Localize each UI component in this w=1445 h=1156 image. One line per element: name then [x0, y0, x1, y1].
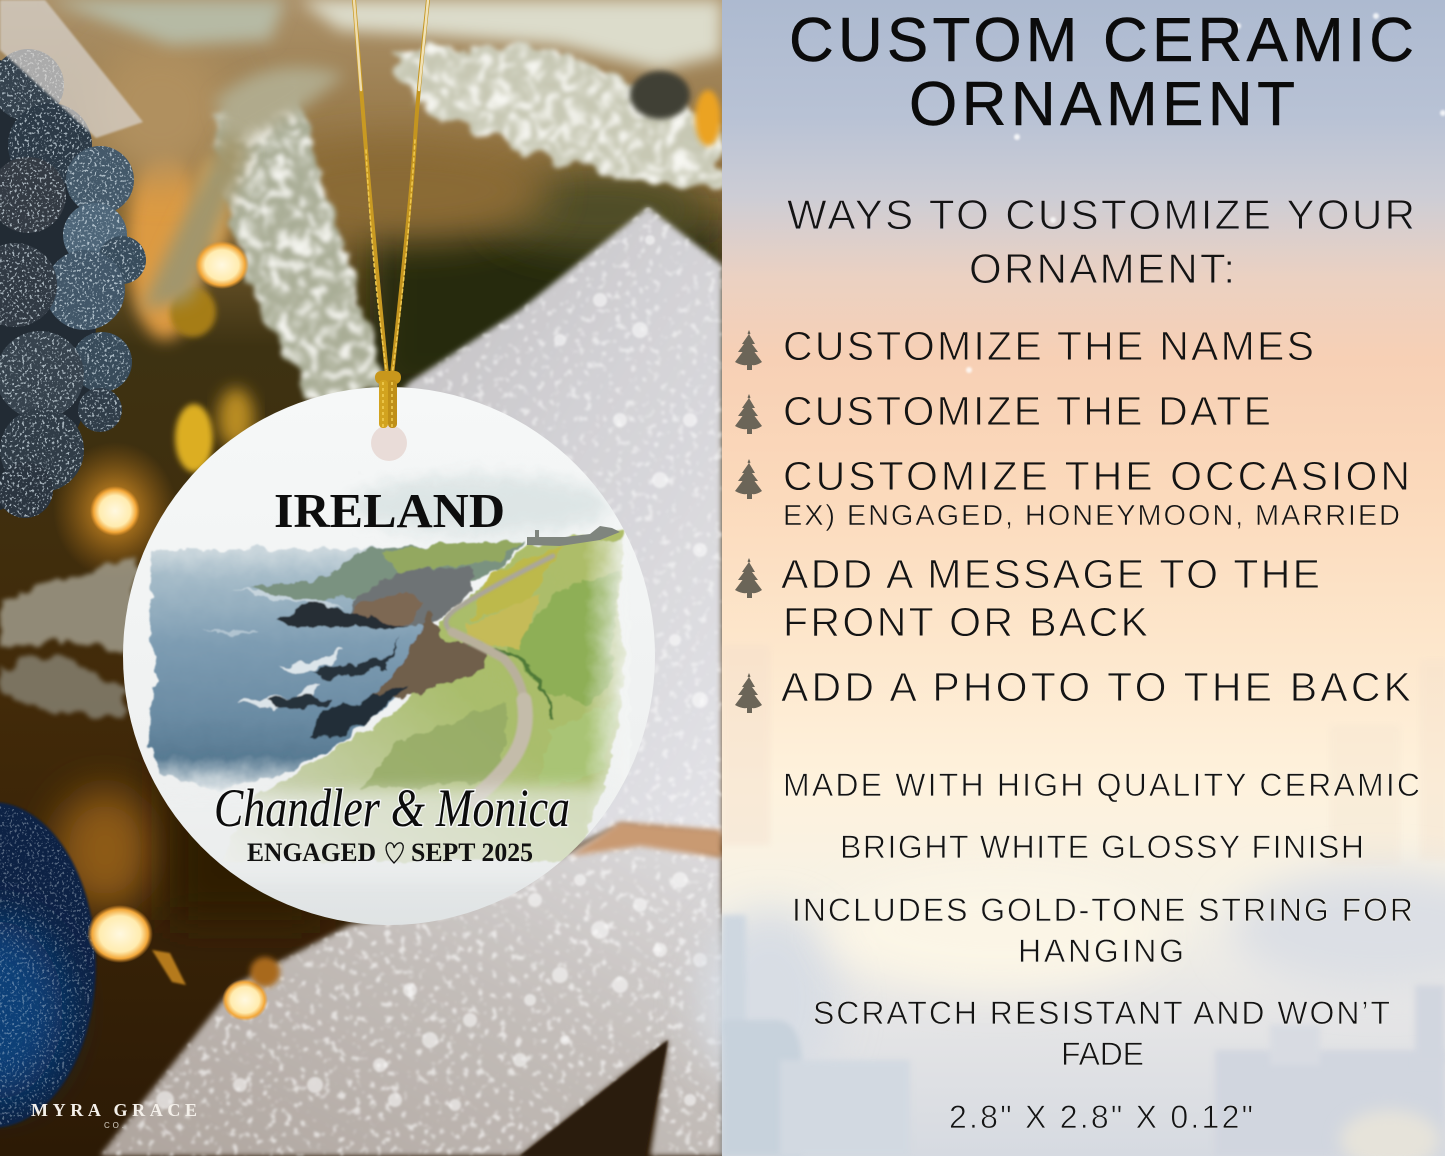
main grass land — [220, 530, 625, 860]
option: occasion examples: EX) ENGAGED, HONEYMOON, MARRIED — [783, 500, 1400, 532]
sky wash — [350, 475, 610, 535]
feature: glossy finish: BRIGHT WHITE GLOSSY FINISH — [840, 829, 1364, 865]
lighthouse buildings — [527, 526, 620, 546]
heading: ways to customize: ORNAMENT: — [969, 245, 1235, 292]
ceramic ornament — [123, 371, 655, 925]
bokeh lights — [87, 241, 280, 1021]
gold hanging string — [354, 0, 428, 375]
cliff face — [372, 612, 490, 700]
option: occasion: CUSTOMIZE THE OCCASION — [783, 453, 1410, 499]
icon: tree bullet — [735, 459, 762, 499]
option: message: ADD A MESSAGE TO THE — [781, 551, 1320, 597]
white glitter gift ribbon lower — [100, 235, 722, 1156]
dark gap beneath ribbon — [520, 1040, 668, 1156]
watermark logo — [31, 1100, 197, 1130]
title — [789, 6, 1414, 139]
glitter ornament balls cluster — [0, 49, 150, 520]
right fade — [584, 536, 628, 816]
dark shore rocks — [308, 685, 410, 738]
heading: ways to customize — [787, 191, 1415, 292]
dark rock point — [276, 602, 410, 626]
text: engaged date: ENGAGED — [247, 838, 376, 867]
sea — [148, 548, 430, 790]
white glitter gift ribbon upper — [399, 204, 722, 850]
panel: customization details — [700, 0, 1445, 1156]
watermark logo: MYRA GRACE — [31, 1100, 197, 1120]
decorative snow specks — [966, 13, 1445, 373]
headland grass top — [380, 540, 522, 575]
feature: gold string: INCLUDES GOLD-TONE STRING FOR — [792, 892, 1413, 928]
text: couple names: Chandler & Monica — [214, 778, 570, 838]
ornament hole — [371, 425, 407, 461]
option: photo: ADD A PHOTO TO THE BACK — [781, 664, 1411, 710]
icon: tree bullet — [735, 394, 762, 434]
feature: scratch resistant: SCRATCH RESISTANT AND WON’T — [813, 995, 1390, 1031]
watermark logo: CO. — [104, 1121, 124, 1130]
footpath — [446, 556, 553, 800]
gold string knot — [375, 371, 401, 428]
background: misty skyline — [700, 645, 1445, 1156]
title: ORNAMENT — [909, 70, 1295, 139]
text: IRELAND: IRELAND — [274, 483, 505, 538]
watercolor landscape — [148, 475, 630, 880]
text: engaged date: SEPT 2025 — [411, 838, 533, 867]
option: names: CUSTOMIZE THE NAMES — [783, 323, 1314, 369]
panel: product photo — [0, 0, 722, 1156]
option: message continued: FRONT OR BACK — [783, 599, 1148, 645]
icon: tree bullet — [735, 558, 762, 598]
distant headland — [250, 540, 525, 600]
feature: scratch resistant continued: FADE — [1061, 1036, 1144, 1072]
glitter bokeh dots — [156, 235, 708, 1111]
feature: ceramic: MADE WITH HIGH QUALITY CERAMIC — [783, 767, 1420, 803]
icon: tree bullet — [735, 330, 762, 370]
hedge by path — [494, 648, 554, 720]
surf — [200, 590, 342, 710]
frosted pine branches — [0, 0, 722, 718]
background: warm blurred tones — [53, 40, 722, 920]
icon: heart — [386, 843, 403, 863]
brown cliff mid — [350, 566, 476, 626]
blue glitter ball — [0, 802, 96, 1128]
soft bottom fade — [150, 785, 620, 880]
feature: dimensions: 2.8" X 2.8" X 0.12" — [949, 1099, 1253, 1135]
text: engaged date — [247, 838, 533, 867]
heading: ways to customize: WAYS TO CUSTOMIZE YOUR — [787, 191, 1415, 238]
list: customization options — [735, 323, 1411, 713]
list: product features — [783, 767, 1420, 1135]
sheer ribbon top left — [0, 0, 143, 138]
icon: tree bullet — [735, 673, 762, 713]
option: date: CUSTOMIZE THE DATE — [783, 388, 1271, 434]
feature: gold string continued: HANGING — [1018, 933, 1184, 969]
title: CUSTOM CERAMIC — [789, 6, 1414, 75]
